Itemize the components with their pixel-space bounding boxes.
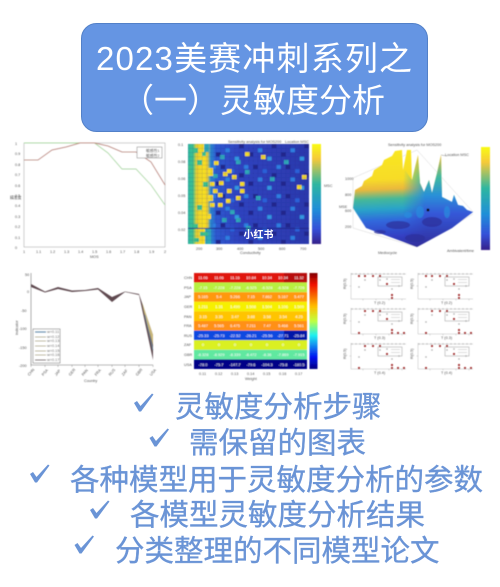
chart: multi-series line chart: JAP: [54, 368, 62, 377]
chart: country by weight table heatmap: -6.525: [245, 285, 257, 290]
chart: line chart of two series: 1.8: [134, 250, 139, 254]
chart: country by weight table heatmap: 1.509: [294, 304, 304, 309]
chart: sensitivity heatmap: 600: [279, 247, 285, 251]
chart: country by weight table heatmap: 0: [298, 342, 301, 347]
chart: country by weight table heatmap: 0.11: [199, 372, 206, 376]
chart: sensitivity heatmap: Sensitivity analysis for MOS200: [228, 140, 281, 144]
chart: multi-series line chart: w=0.13: [47, 339, 59, 343]
chart: line chart of two series: 1.7: [120, 250, 125, 254]
chart: multi-series line chart: PSA: [41, 368, 49, 377]
chart: sensitivity heatmap: 0.02: [178, 228, 185, 232]
chart: country by weight table heatmap: -8.36: [263, 352, 271, 357]
chart: country by weight table heatmap: 5.565: [214, 323, 224, 328]
chart: country by weight table heatmap: 0.16: [279, 372, 286, 376]
chart: 3D surface plot: Sensitivity analysis for MOS200: [388, 143, 441, 147]
chart: line chart of two series: 0.4: [15, 204, 20, 208]
chart: six small scatter subplots: T (0.2): [374, 301, 386, 305]
chart: country by weight table heatmap: 0: [282, 342, 285, 347]
chart: country by weight table heatmap: -7.869: [277, 352, 289, 357]
chart: line chart of two series: 0: [15, 246, 17, 250]
chart: line chart of two series: 敏感性1: [146, 148, 160, 153]
chart: sensitivity heatmap: 300: [216, 247, 222, 251]
chart: country by weight table heatmap: -27.71: [277, 333, 289, 338]
chart: country by weight table heatmap: 5.477: [294, 294, 304, 299]
chart: six small scatter subplots: T (0.3): [441, 336, 453, 340]
chart: country by weight table heatmap: PSA: [184, 286, 192, 290]
chart: multi-series line chart: w=0.12: [47, 335, 59, 339]
chart: 3D surface plot: Ambivalent/time: [447, 249, 474, 253]
chart: line chart of two series: 0.8: [15, 163, 20, 167]
chart: 3D surface plot: Mediocycle: [378, 251, 397, 255]
chart: line chart of two series: 0.5: [15, 194, 20, 198]
chart: country by weight table heatmap: RUS: [184, 334, 192, 338]
chart: country by weight table heatmap: 5.468: [278, 323, 288, 328]
chart: 3D surface plot: 1000: [345, 177, 353, 181]
chart: multi-series line chart: CHN: [27, 368, 36, 377]
chart: country by weight table heatmap: -147.7: [229, 362, 241, 367]
chart: six small scatter subplots: R(0.5): [343, 313, 347, 324]
chart: country by weight table heatmap: 0.14: [247, 372, 254, 376]
chart: sensitivity heatmap: 400: [237, 247, 243, 251]
chart: country by weight table heatmap: 1.31: [215, 304, 223, 309]
chart: multi-series line chart: GER: [68, 368, 77, 377]
chart: country by weight table heatmap: 0: [202, 342, 205, 347]
chart: country by weight table heatmap: 0.12: [215, 372, 222, 376]
chart: country by weight table heatmap: -25.73: [213, 333, 225, 338]
chart: country by weight table heatmap: 7.47: [263, 323, 271, 328]
chart: country by weight table heatmap: GER: [184, 305, 192, 309]
chart: sensitivity heatmap: 0.04: [178, 211, 185, 215]
watermark: 小红书: [244, 228, 274, 241]
chart: sensitivity heatmap: [178, 140, 333, 255]
chart: country by weight table heatmap: -6.528: [277, 285, 289, 290]
chart: country by weight table heatmap: 11.06: [214, 275, 224, 280]
chart: country by weight table heatmap: 5.167: [278, 294, 288, 299]
chart: sensitivity heatmap: 500: [258, 247, 264, 251]
chart: sensitivity heatmap: 0.05: [178, 194, 185, 198]
chart: country by weight table heatmap: -7.915: [293, 352, 305, 357]
chart: multi-series line chart: w=0.16: [47, 353, 59, 357]
chart: six small scatter subplots: T (0.4): [441, 371, 453, 375]
chart: country by weight table heatmap: -78.0: [199, 362, 208, 367]
chart: multi-series line chart: Indicator: [15, 320, 19, 335]
chart: country by weight table heatmap: -25.84: [293, 333, 305, 338]
chart: country by weight table heatmap: -7.228: [213, 285, 225, 290]
chart: six small scatter subplots: [343, 273, 473, 375]
chart: line chart of two series: 0.3: [15, 215, 20, 219]
chart: six small scatter subplots: T (0.4): [374, 371, 386, 375]
chart: multi-series line chart: w=0.15: [47, 349, 59, 353]
chart: country by weight table heatmap: 1.499: [230, 304, 240, 309]
chart: country by weight table heatmap: 0.13: [231, 372, 238, 376]
chart: country by weight table heatmap: 4.25: [295, 314, 303, 319]
chart: multi-series line chart: -200: [19, 364, 27, 368]
bullet 5: 分类整理的不同模型论文: [115, 535, 440, 568]
chart: country by weight table heatmap: -7.228: [229, 285, 241, 290]
chart: country by weight table heatmap: 10.84: [246, 275, 257, 280]
chart: multi-series line chart: FRA: [94, 368, 102, 377]
chart: six small scatter subplots: R(0.5): [410, 348, 414, 359]
chart: country by weight table heatmap: -8.929: [213, 352, 225, 357]
chart: country by weight table heatmap: 1.504: [262, 304, 273, 309]
chart: 3D surface plot: Location MSC: [445, 153, 469, 157]
chart: country by weight table heatmap: JAP: [184, 295, 191, 299]
chart: country by weight table heatmap: 11.06: [198, 275, 208, 280]
chart: country by weight table heatmap: 3.58: [263, 314, 271, 319]
chart: line chart of two series: 1.4: [78, 250, 83, 254]
bullet list: [30, 391, 483, 568]
chart: 3D surface plot: 200: [345, 225, 351, 229]
chart: multi-series line chart: Country: [84, 379, 97, 383]
chart: country by weight table heatmap: -25.56: [261, 333, 273, 338]
chart: line chart of two series: 1.1: [36, 250, 41, 254]
chart: country by weight table heatmap: 10.34: [262, 275, 273, 280]
chart: country by weight table heatmap: 5.266: [230, 294, 240, 299]
chart: line chart of two series: 2: [164, 250, 166, 254]
chart: line chart of two series: 1.2: [50, 250, 55, 254]
chart: country by weight table heatmap: 0.15: [263, 372, 270, 376]
title line 1: 2023美赛冲刺系列之: [96, 40, 412, 77]
chart: 3D surface plot: [339, 143, 490, 255]
chart: multi-series line chart: -100: [19, 327, 27, 331]
chart: country by weight table heatmap: 6.475: [230, 323, 240, 328]
chart: country by weight table heatmap: 3.47: [231, 314, 239, 319]
chart: country by weight table heatmap: PAN: [184, 315, 192, 319]
chart: country by weight table heatmap: 0.17: [295, 372, 302, 376]
chart: six small scatter subplots: R(0.5): [343, 348, 347, 359]
chart: country by weight table heatmap: 11.16: [230, 275, 240, 280]
chart: multi-series line chart: USA: [149, 368, 157, 377]
chart: multi-series line chart: GBR: [135, 368, 144, 377]
chart: country by weight table heatmap: -8.328: [197, 352, 209, 357]
chart: country by weight table heatmap: 3.88: [247, 314, 255, 319]
chart: country by weight table heatmap: GBR: [184, 353, 192, 357]
bullet 3: 各种模型用于灵敏度分析的参数: [70, 464, 483, 497]
chart: country by weight table heatmap: 11.32: [294, 275, 304, 280]
chart: six small scatter subplots: R(0.5): [343, 278, 347, 289]
chart: multi-series line chart: 0: [27, 290, 29, 294]
chart: country by weight table heatmap: 0: [250, 342, 253, 347]
chart: country by weight table heatmap: [184, 273, 318, 381]
chart: country by weight table heatmap: 3.15: [199, 314, 207, 319]
chart: country by weight table heatmap: 1.508: [246, 304, 256, 309]
chart: 3D surface plot: 800: [345, 193, 351, 197]
chart: sensitivity heatmap: 0.06: [178, 177, 185, 181]
chart: line chart of two series: 1: [23, 250, 25, 254]
chart: country by weight table heatmap: 5.561: [294, 323, 304, 328]
chart: country by weight table heatmap: -7.726: [293, 285, 305, 290]
bullet 2: 需保留的图表: [189, 427, 366, 460]
chart: line chart of two series: [10, 142, 166, 259]
chart: country by weight table heatmap: FRA: [184, 324, 192, 328]
chart: country by weight table heatmap: 5.165: [198, 294, 208, 299]
chart: six small scatter subplots: T (0.3): [374, 336, 386, 340]
chart: line chart of two series: 0.1: [15, 236, 20, 240]
chart: country by weight table heatmap: -22.52: [229, 333, 241, 338]
chart: country by weight table heatmap: -8.472: [245, 352, 257, 357]
chart: country by weight table heatmap: -25.33: [197, 333, 209, 338]
chart: line chart of two series: 1.6: [106, 250, 111, 254]
chart: sensitivity heatmap: 0.1: [178, 143, 183, 147]
chart: six small scatter subplots: R(0.5): [410, 313, 414, 324]
chart: country by weight table heatmap: 1.106: [278, 304, 288, 309]
chart: country by weight table heatmap: 7.211: [246, 323, 256, 328]
chart: country by weight table heatmap: -6.528: [261, 285, 273, 290]
chart: country by weight table heatmap: 0: [266, 342, 269, 347]
chart: sensitivity heatmap: MSC: [324, 184, 333, 188]
chart: 3D surface plot: MSE: [339, 205, 348, 209]
title banner: [82, 24, 428, 132]
chart: country by weight table heatmap: 7.862: [262, 294, 272, 299]
chart: country by weight table heatmap: CHN: [184, 276, 192, 280]
chart: country by weight table heatmap: -75.7: [215, 362, 223, 367]
chart: line chart of two series: 0.9: [15, 152, 20, 156]
chart: country by weight table heatmap: -26.21: [245, 333, 257, 338]
chart: sensitivity heatmap: 0.08: [178, 160, 185, 164]
chart: line chart of two series: 0.7: [15, 173, 20, 177]
chart: multi-series line chart: w=0.14: [47, 344, 59, 348]
chart: 3D surface plot: 600: [345, 209, 351, 213]
chart: country by weight table heatmap: -75.8: [279, 362, 287, 367]
chart: multi-series line chart: [15, 273, 157, 383]
chart: country by weight table heatmap: 10.34: [278, 275, 289, 280]
chart: country by weight table heatmap: -8.339: [229, 352, 241, 357]
chart: country by weight table heatmap: Weight: [245, 377, 258, 381]
chart: line chart of two series: 1: [15, 142, 17, 146]
chart: line chart of two series: 敏感性2: [146, 153, 160, 158]
chart: country by weight table heatmap: 7.15: [247, 294, 255, 299]
chart: country by weight table heatmap: USA: [184, 363, 192, 367]
chart: line chart of two series: 1.3: [64, 250, 69, 254]
chart: sensitivity heatmap: 200: [196, 247, 202, 251]
chart: multi-series line chart: ZAF: [121, 368, 129, 377]
chart: line chart of two series: 1.5: [92, 250, 97, 254]
chart: country by weight table heatmap: 5.487: [198, 323, 208, 328]
chart: country by weight table heatmap: 3.35: [215, 314, 223, 319]
chart: country by weight table heatmap: 0: [234, 342, 237, 347]
chart: country by weight table heatmap: 0: [218, 342, 221, 347]
chart: country by weight table heatmap: -104.3: [261, 362, 273, 367]
chart: multi-series line chart: -50: [21, 309, 26, 313]
chart: line chart of two series: 0.6: [15, 184, 20, 188]
chart: six small scatter subplots: R(0.5): [410, 278, 414, 289]
chart: country by weight table heatmap: 3.54: [279, 314, 288, 319]
chart: line chart of two series: 0.2: [15, 225, 20, 229]
chart: sensitivity heatmap: Location MSC: [285, 140, 309, 144]
chart: country by weight table heatmap: 5.4: [216, 294, 223, 299]
chart: multi-series line chart: RUS: [108, 368, 117, 377]
chart: sensitivity heatmap: 700: [300, 247, 306, 251]
chart: country by weight table heatmap: ZAF: [184, 343, 192, 347]
chart: multi-series line chart: w=0.17: [47, 358, 59, 362]
bullet 1: 灵敏度分析步骤: [175, 391, 382, 424]
chart: country by weight table heatmap: 1.211: [198, 304, 208, 309]
bullet 4: 各模型灵敏度分析结果: [130, 499, 425, 532]
title line 2: （一）灵敏度分析: [121, 82, 385, 119]
chart: country by weight table heatmap: -180.5: [293, 362, 305, 367]
chart: multi-series line chart: w=0.11: [47, 330, 59, 334]
chart: line chart of two series: 1.9: [149, 250, 154, 254]
chart: six small scatter subplots: T (0.2): [441, 301, 453, 305]
chart: multi-series line chart: PAN: [81, 368, 89, 377]
chart: line chart of two series: 精准度: [10, 195, 22, 200]
chart: country by weight table heatmap: -79.6: [247, 362, 255, 367]
chart: multi-series line chart: 50: [25, 273, 29, 277]
chart: sensitivity heatmap: Conductivity: [240, 251, 261, 255]
chart: country by weight table heatmap: -7.15: [199, 285, 207, 290]
chart: line chart of two series: MOS: [90, 255, 99, 259]
chart: multi-series line chart: -150: [19, 346, 27, 350]
